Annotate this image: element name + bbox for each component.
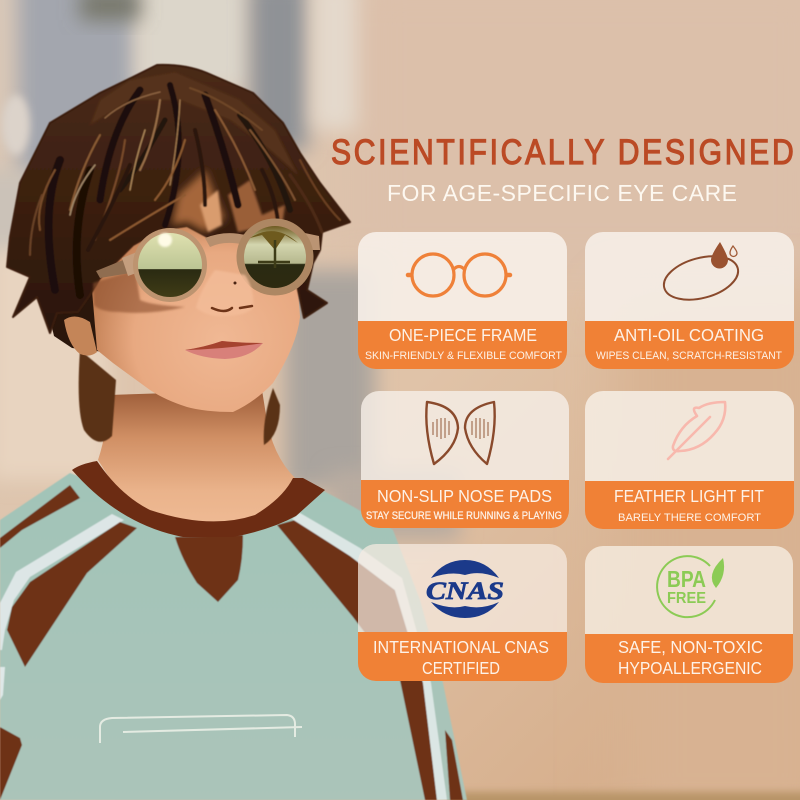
card: feather light fit: FEATHER LIGHT FIT — [614, 486, 764, 506]
card: international CNAS certified: INTERNATIONAL CNAS — [373, 637, 549, 657]
icon: glasses — [408, 254, 510, 296]
collar — [72, 461, 325, 537]
card: anti-oil coating — [585, 232, 794, 369]
card: non-slip nose pads — [361, 391, 569, 528]
icon: oil drop on lens — [659, 242, 743, 307]
title: SCIENTIFICALLY DESIGNED — [331, 132, 794, 172]
shirt — [0, 473, 467, 800]
card: international CNAS certified — [358, 544, 567, 681]
hair — [7, 65, 350, 333]
card: international CNAS certified: CERTIFIED — [422, 658, 500, 678]
hair behind ear — [42, 268, 104, 352]
card: feather light fit: BARELY THERE COMFORT — [618, 512, 761, 524]
chest print — [100, 715, 302, 743]
card: feather light fit — [585, 391, 794, 529]
face shadow under glasses — [93, 270, 185, 313]
icon: nose pads — [426, 402, 495, 464]
card: safe, non-toxic: SAFE, NON-TOXIC — [618, 637, 763, 657]
card: one-piece frame: ONE-PIECE FRAME — [389, 325, 537, 345]
neck — [98, 390, 295, 525]
icon: BPA free badge: FREE — [667, 590, 706, 607]
card: anti-oil coating: WIPES CLEAN, SCRATCH-RESISTANT — [596, 350, 782, 362]
card: non-slip nose pads: STAY SECURE WHILE RUNNING & PLAYING — [366, 510, 562, 522]
icon: feather leaf — [668, 402, 725, 459]
icon: BPA free badge: BPA — [667, 566, 706, 592]
subtitle: FOR AGE-SPECIFIC EYE CARE — [387, 180, 737, 206]
card: one-piece frame: SKIN-FRIENDLY & FLEXIBLE COMFORT — [365, 350, 562, 362]
boy wearing sunglasses — [0, 65, 467, 800]
icon: BPA free badge — [657, 556, 724, 617]
icon: CNAS logo — [426, 560, 504, 618]
card: safe, non-toxic — [585, 546, 793, 683]
face — [92, 205, 300, 412]
card: safe, non-toxic: HYPOALLERGENIC — [618, 658, 762, 678]
icon: CNAS logo: CNAS — [426, 578, 504, 605]
ear — [64, 316, 97, 356]
card: anti-oil coating: ANTI-OIL COATING — [614, 325, 764, 345]
card: one-piece frame — [358, 232, 567, 369]
sunglasses — [96, 218, 320, 302]
back hair — [79, 350, 280, 445]
mouth — [185, 341, 263, 359]
card: non-slip nose pads: NON-SLIP NOSE PADS — [377, 486, 552, 506]
nose — [196, 270, 253, 316]
